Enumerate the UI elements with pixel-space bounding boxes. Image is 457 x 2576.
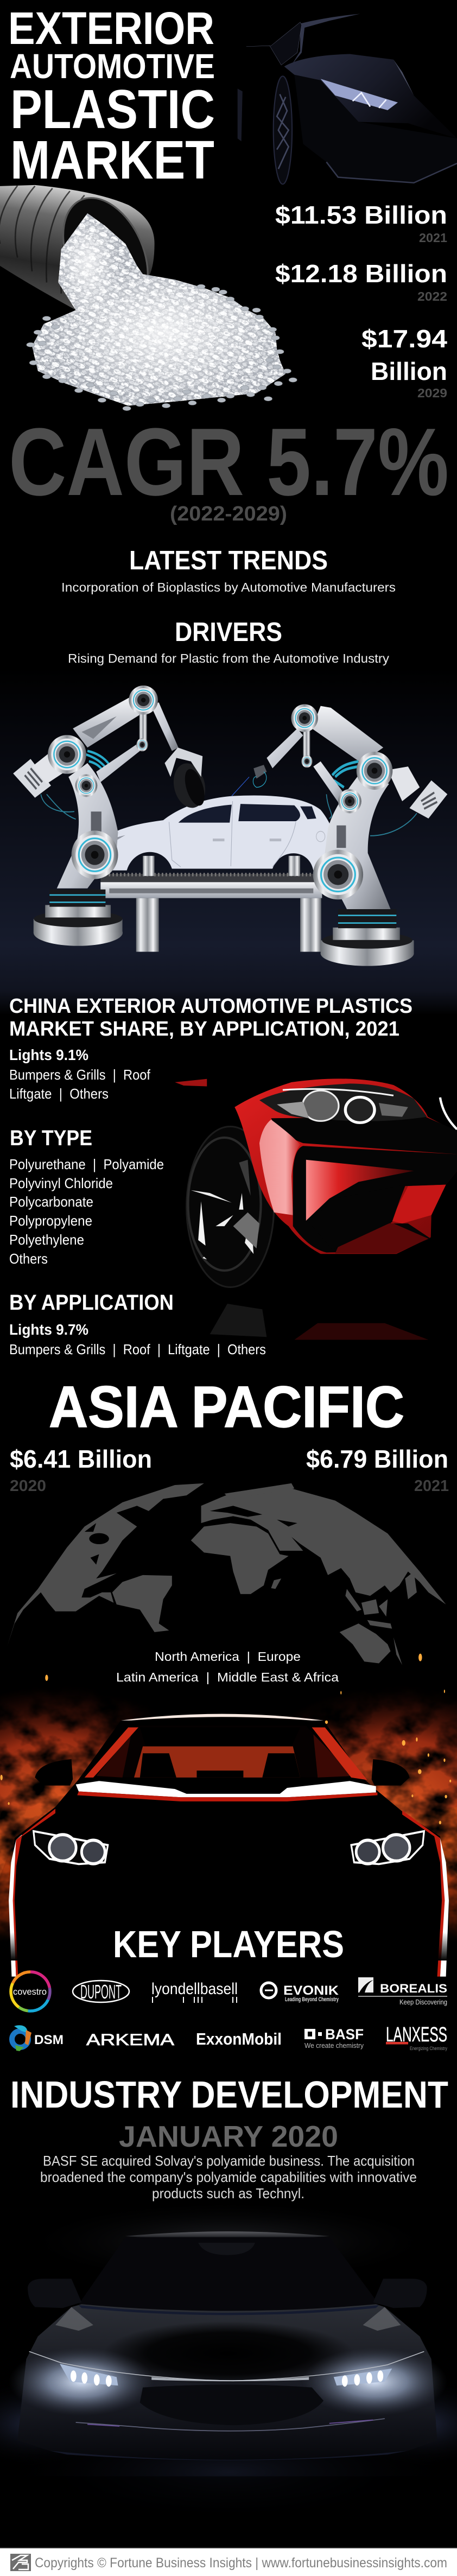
panel: industry development: BASF SE acquired Solvay's polyamide business. The acquisition (43, 2153, 415, 2169)
left robot arm (13, 686, 211, 946)
panel: China market share: Bumpers & Grills | Roof (9, 1067, 151, 1083)
car silhouette (9, 1714, 449, 1977)
image: red sports car (175, 1078, 457, 1340)
conveyor table (100, 856, 322, 952)
footer (0, 2548, 457, 2576)
panel: China market share: MARKET SHARE, BY APPLICATION, 2021 (9, 1018, 399, 1040)
title: MARKET (10, 130, 214, 191)
panel: Asia Pacific heading and values: $6.79 Billion (306, 1445, 448, 1473)
panel: by application: Bumpers & Grills | Roof | Liftgate | Others (9, 1341, 266, 1357)
panel: Asia Pacific heading and values: ASIA PACIFIC (49, 1374, 404, 1439)
heading: key players: KEY PLAYERS (113, 1923, 344, 1965)
logo: Evonik: Leading Beyond Chemistry (285, 1996, 339, 2003)
panel: industry development: JANUARY 2020 (119, 2120, 338, 2153)
panel: latest trends (61, 546, 396, 594)
panel: Asia Pacific heading and values: 2020 (10, 1477, 46, 1495)
car wheel (187, 1127, 274, 1337)
panel: company logos (11, 1972, 447, 2051)
white car body (96, 795, 338, 871)
panel: CAGR: (2022-2029) (170, 503, 287, 525)
logo: LyondellBasell: lyondellbasell (151, 1980, 238, 1998)
market values: 2021 (419, 231, 447, 245)
title (8, 3, 215, 191)
image: hero dark sports car (238, 14, 457, 184)
title: EXTERIOR (8, 3, 214, 54)
image: robot arms assembling a car (13, 686, 447, 966)
market values: 2029 (417, 386, 447, 400)
fade of fire into black (0, 1932, 457, 1960)
panel: drivers: DRIVERS (175, 618, 282, 647)
background gradient for robot section (0, 668, 457, 1015)
panel: China market share: Liftgate | Others (9, 1086, 109, 1102)
market values: $11.53 Billion (275, 201, 447, 229)
logo: DSM: DSM (34, 2033, 64, 2047)
panel: Asia Pacific heading and values: $6.41 Billion (10, 1445, 152, 1473)
panel: by type: Polyurethane | Polyamide (9, 1156, 164, 1172)
panel: Asia Pacific heading and values: 2021 (414, 1477, 449, 1495)
panel: by type: Others (9, 1251, 48, 1267)
panel: latest trends: Incorporation of Bioplastics by Automotive Manufacturers (61, 580, 396, 594)
panel: drivers: Rising Demand for Plastic from the Automotive Industry (68, 651, 390, 665)
panel: hero header (0, 3, 457, 413)
panel: China market share: Lights 9.1% (9, 1046, 88, 1063)
panel: by type: Polyethylene (9, 1232, 84, 1248)
title: AUTOMOTIVE (10, 47, 215, 86)
logo: Arkema: ARKEMA (86, 2031, 174, 2049)
market values: 2022 (417, 289, 447, 303)
panel: by application: Lights 9.7% (9, 1321, 88, 1338)
regions list: North America | Europe (155, 1649, 301, 1664)
logo: DuPont (73, 1981, 129, 2003)
market values (275, 201, 447, 400)
logo: Borealis: BOREALIS (380, 1982, 447, 1995)
panel: by application (9, 1291, 266, 1357)
logo: covestro: covestro (13, 1987, 47, 1997)
icon: Fortune Business Insights logo (10, 2554, 31, 2571)
panel: China market share: CHINA EXTERIOR AUTOMOTIVE PLASTICS (9, 995, 412, 1018)
logo: DSM (12, 2025, 64, 2051)
market values: $12.18 Billion (275, 259, 447, 288)
panel: Asia Pacific heading and values (10, 1374, 449, 1495)
title: PLASTIC (10, 79, 215, 140)
logo: DuPont: DUPONT (80, 1981, 122, 2003)
image: dark car with glowing headlights (0, 2200, 457, 2550)
car headlight (259, 1083, 427, 1122)
panel: by type: Polycarbonate (9, 1194, 93, 1210)
logo: covestro (11, 1972, 50, 2011)
market values: $17.94 (361, 325, 447, 353)
logo: BASF: We create chemistry (304, 2041, 364, 2050)
car headlights (34, 1831, 424, 1864)
market values: Billion (371, 357, 447, 385)
panel: drivers (68, 618, 390, 665)
panel: by type (9, 1126, 164, 1267)
regions list: Latin America | Middle East & Africa (116, 1670, 339, 1684)
logo: Borealis: Keep Discovering (399, 1998, 447, 2006)
panel: by type: Polypropylene (9, 1213, 92, 1229)
logo: Lanxess: Energizing Chemistry (410, 2046, 447, 2051)
logo: BASF: BASF (325, 2026, 364, 2042)
sparks (1, 1654, 451, 1824)
panel: industry development: products such as Technyl. (152, 2185, 304, 2201)
panel: latest trends: LATEST TRENDS (129, 546, 328, 575)
logo: Evonik (261, 1983, 339, 2003)
image: fire and red-lit car (0, 1654, 457, 1977)
regions list (116, 1649, 339, 1684)
panel: by type: BY TYPE (10, 1126, 92, 1150)
panel: industry development (10, 2073, 448, 2201)
logo: Borealis (358, 1977, 447, 2006)
logo: BASF (304, 2026, 364, 2050)
panel: by application: BY APPLICATION (9, 1291, 174, 1315)
fire background (0, 1683, 457, 1945)
panel: industry development: broadened the company's polyamide capabilities with innovative (40, 2169, 417, 2185)
panel: by type: Polyvinyl Chloride (9, 1175, 113, 1191)
right robot arm (232, 704, 447, 966)
panel: China market share (9, 995, 412, 1102)
logo: ExxonMobil: ExxonMobil (196, 2029, 282, 2048)
car body (175, 1078, 457, 1340)
image: tube spilling plastic pellets (0, 185, 297, 413)
image: world map globe (7, 1483, 446, 1665)
logo: Evonik: EVONIK (283, 1983, 339, 1998)
